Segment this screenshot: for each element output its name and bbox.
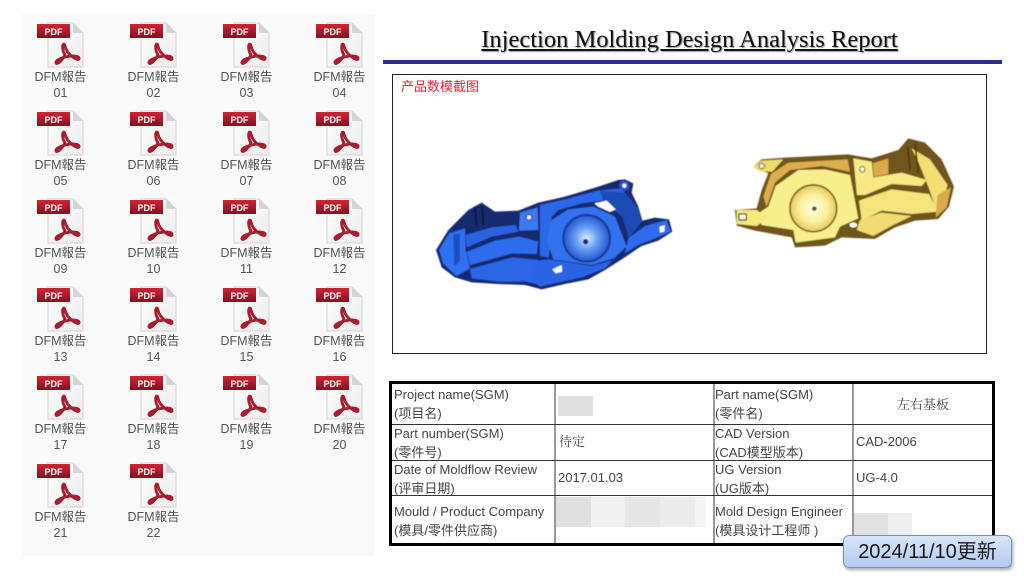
label: part name (715, 387, 813, 421)
blurred value: company (556, 497, 706, 527)
file icon: DFM report 08: DFM報告 (313, 158, 366, 172)
callout: update date badge: 2024/11/10更新 (858, 541, 997, 563)
file icon: DFM report 20: 20 (333, 438, 346, 452)
file icon: DFM report 07: DFM報告 (220, 158, 273, 172)
file icon: DFM report 21: 21 (54, 526, 67, 540)
file icon: DFM report 11: 11 (240, 262, 253, 276)
file icon: DFM report 04: DFM報告 (313, 70, 366, 84)
label: part number (394, 426, 504, 460)
file icon: DFM report 03: DFM報告 (220, 70, 273, 84)
value: CAD version: CAD-2006 (856, 434, 917, 449)
file icon: DFM report 05: DFM報告 (34, 158, 87, 172)
file icon: DFM report 15: 15 (240, 350, 253, 364)
file icon: DFM report 05: PDF (44, 115, 63, 125)
file icon: DFM report 13: DFM報告 (34, 334, 87, 348)
file icon: DFM report 14: PDF (138, 291, 156, 301)
file icon: DFM report 12: PDF (324, 203, 342, 213)
file icon: DFM report 01: DFM報告 (34, 70, 87, 84)
title: Injection Molding Design Analysis Report (481, 26, 898, 53)
title rule (383, 60, 1002, 64)
icon: yellow part model (735, 138, 954, 247)
icon: blue part model (436, 179, 672, 289)
file icon: DFM report 13 (34, 286, 87, 364)
value: part name: 左右基板 (897, 397, 949, 412)
caption: 产品数模截图 (401, 79, 479, 94)
label: project name: Project name(SGM) (394, 387, 509, 402)
file icon: DFM report 04: 04 (333, 86, 346, 100)
file icon: DFM report 14: 14 (147, 350, 160, 364)
blurred value: engineer (854, 513, 912, 537)
label: mould company (394, 504, 544, 538)
file icon: DFM report 03 (220, 22, 273, 100)
file icon: DFM report 02: DFM報告 (127, 70, 180, 84)
table: project information (389, 381, 995, 546)
blurred value: project name (558, 396, 593, 416)
label: UG version: UG Version (715, 462, 781, 477)
file icon: DFM report 14 (127, 286, 180, 364)
file icon: DFM report 19: 19 (240, 438, 253, 452)
file icon: DFM report 09 (34, 198, 87, 276)
file icon: DFM report 05 (34, 110, 87, 188)
file icon: DFM report 15: PDF (230, 291, 249, 301)
label: review date: (评审日期) (394, 481, 455, 496)
file icon: DFM report 11: DFM報告 (220, 246, 273, 260)
label: CAD version: (CAD模型版本) (715, 445, 803, 460)
file icon: DFM report 16: 16 (333, 350, 346, 364)
file icon: DFM report 17 (34, 374, 87, 452)
label: review date: Date of Moldflow Review (394, 462, 537, 477)
label: mould company: Mould / Product Company (394, 504, 544, 519)
file icon: DFM report 07: PDF (230, 115, 249, 125)
file icon: DFM report 12: 12 (333, 262, 346, 276)
label: UG version: (UG版本) (715, 481, 769, 496)
file icon: DFM report 21 (34, 462, 87, 540)
label: project name: (项目名) (394, 406, 442, 421)
file icon: DFM report 16: DFM報告 (313, 334, 366, 348)
callout: update date badge (843, 535, 1012, 568)
file icon: DFM report 06: 06 (147, 174, 160, 188)
label: mold engineer (715, 504, 843, 538)
file icon: DFM report 06: DFM報告 (127, 158, 180, 172)
file icon: DFM report 19: PDF (230, 379, 249, 389)
label: mold engineer: Mold Design Engineer (715, 504, 843, 519)
file icon: DFM report 17: PDF (44, 379, 63, 389)
file icon: DFM report 13: PDF (44, 291, 63, 301)
file icon: DFM report 19: DFM報告 (220, 422, 273, 436)
file icon: DFM report 05: 05 (54, 174, 67, 188)
file icon: DFM report 10: PDF (138, 203, 156, 213)
file icon: DFM report 03: PDF (230, 27, 249, 37)
file icon: DFM report 10: DFM報告 (127, 246, 180, 260)
file icon: DFM report 18 (127, 374, 180, 452)
file icon: DFM report 02: PDF (138, 27, 156, 37)
file icon: DFM report 02: 02 (147, 86, 160, 100)
file icon: DFM report 08: 08 (333, 174, 346, 188)
file icon: DFM report 08 (313, 110, 366, 188)
file icon: DFM report 17: DFM報告 (34, 422, 87, 436)
file icon: DFM report 18: DFM報告 (127, 422, 180, 436)
file icon: DFM report 14: DFM報告 (127, 334, 180, 348)
file icon: DFM report 22 (127, 462, 180, 540)
file icon: DFM report 20 (313, 374, 366, 452)
panel: PDF report files (22, 14, 375, 556)
file icon: DFM report 16 (313, 286, 366, 364)
label: project name (394, 387, 509, 421)
file icon: DFM report 04: PDF (324, 27, 342, 37)
value: UG version: UG-4.0 (856, 470, 898, 485)
file icon: DFM report 03: 03 (240, 86, 253, 100)
label: CAD version (715, 426, 803, 460)
file icon: DFM report 06: PDF (138, 115, 156, 125)
file icon: DFM report 01: 01 (54, 86, 67, 100)
file icon: DFM report 11: PDF (230, 203, 249, 213)
file icon: DFM report 12: DFM報告 (313, 246, 366, 260)
file icon: DFM report 17: 17 (54, 438, 67, 452)
file icon: DFM report 09: DFM報告 (34, 246, 87, 260)
file icon: DFM report 16: PDF (324, 291, 342, 301)
label: CAD version: CAD Version (715, 426, 789, 441)
label: UG version (715, 462, 781, 496)
grid lines (392, 384, 992, 543)
file icon: DFM report 08: PDF (324, 115, 342, 125)
file icon: DFM report 10: 10 (147, 262, 160, 276)
label: mould company: (模具/零件供应商) (394, 523, 497, 538)
file icon: DFM report 19 (220, 374, 273, 452)
file icon: DFM report 22: DFM報告 (127, 510, 180, 524)
file icon: DFM report 10 (127, 198, 180, 276)
label: part number: (零件号) (394, 445, 442, 460)
file icon: DFM report 20: DFM報告 (313, 422, 366, 436)
label: part number: Part number(SGM) (394, 426, 504, 441)
file icon: DFM report 09: 09 (54, 262, 67, 276)
label: part name: Part name(SGM) (715, 387, 813, 402)
file icon: DFM report 02 (127, 22, 180, 100)
file icon: DFM report 09: PDF (44, 203, 63, 213)
file icon: DFM report 18: PDF (138, 379, 156, 389)
file icon: DFM report 15 (220, 286, 273, 364)
file icon: DFM report 21: DFM報告 (34, 510, 87, 524)
panel: product CAD screenshot (392, 74, 987, 354)
value: part number: 待定 (559, 434, 585, 449)
label: part name: (零件名) (715, 406, 763, 421)
file icon: DFM report 18: 18 (147, 438, 160, 452)
label: mold engineer: (模具设计工程师 ) (715, 523, 818, 538)
file icon: DFM report 15: DFM報告 (220, 334, 273, 348)
label: review date (394, 462, 537, 496)
file icon: DFM report 01: PDF (44, 27, 63, 37)
file icon: DFM report 20: PDF (324, 379, 342, 389)
file icon: DFM report 06 (127, 110, 180, 188)
file icon: DFM report 22: 22 (147, 526, 160, 540)
file icon: DFM report 11 (220, 198, 273, 276)
file icon: DFM report 07: 07 (240, 174, 253, 188)
file icon: DFM report 22: PDF (138, 467, 156, 477)
file icon: DFM report 21: PDF (44, 467, 63, 477)
file icon: DFM report 07 (220, 110, 273, 188)
file icon: DFM report 12 (313, 198, 366, 276)
file icon: DFM report 13: 13 (54, 350, 67, 364)
file icon: DFM report 01 (34, 22, 87, 100)
value: review date: 2017.01.03 (558, 470, 623, 485)
file icon: DFM report 04 (313, 22, 366, 100)
